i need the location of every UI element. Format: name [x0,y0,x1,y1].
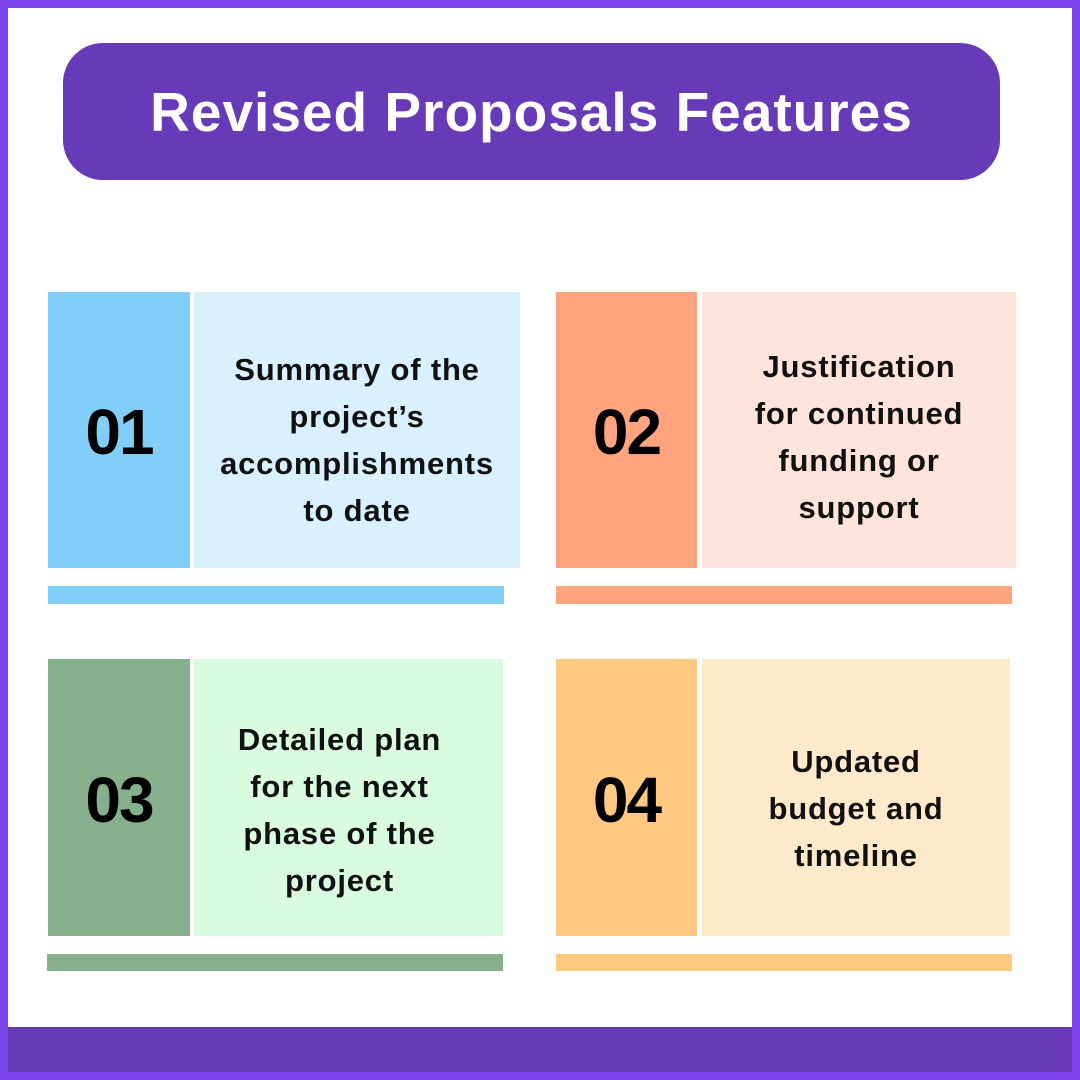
text 02 [702,292,1016,568]
number 01 [48,292,190,568]
text 04: timeline [794,838,918,873]
number 03 [48,659,190,936]
text 03: Detailed plan [238,722,441,756]
title banner [63,43,1000,180]
number 01: 01 [85,396,153,468]
number 03: 03 [85,764,153,836]
title banner: Revised Proposals Features [150,80,913,142]
text 01: to date [303,493,411,528]
text 04: budget and [768,791,944,826]
panel 02 [556,292,1016,604]
bar 02 [556,586,1012,604]
number 02: 02 [593,396,660,468]
text 01: accomplishments [220,446,494,481]
number 04 [556,659,697,936]
text 01: project’s [289,399,425,434]
text 03 [194,659,503,936]
text 03: project [285,862,394,898]
bar 04 [556,954,1012,971]
bar 03 [47,954,503,971]
number 02 [556,292,697,568]
text 01: Summary of the [234,352,480,387]
text 04: Updated [791,744,921,779]
footer bar [8,1027,1072,1072]
panel 03 [47,659,503,971]
text 03: phase of the [243,816,436,850]
text 03: for the next [250,768,429,804]
text 02: Justification [762,349,955,384]
text 01 [194,292,520,568]
text 02: funding or [778,443,940,478]
bar 01 [48,586,504,604]
panel 04 [556,659,1012,971]
text 02: support [798,490,919,525]
text 02: for continued [755,396,963,431]
panel 01 [48,292,520,604]
text 04 [702,659,1010,936]
number 04: 04 [593,764,660,836]
